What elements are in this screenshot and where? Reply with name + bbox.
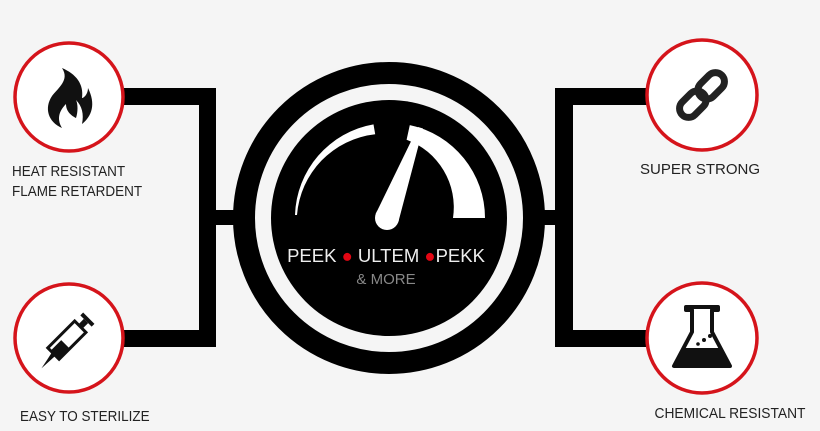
icon: flask bbox=[674, 307, 730, 366]
label: super strong: SUPER STRONG bbox=[640, 161, 760, 178]
icon: chain bbox=[676, 69, 728, 121]
gauge needle bbox=[375, 127, 423, 230]
label: flame retardent: FLAME RETARDENT bbox=[12, 183, 142, 200]
label: heat resistant: HEAT RESISTANT bbox=[12, 163, 125, 180]
connector: left bracket bbox=[110, 88, 239, 347]
central gauge bbox=[244, 73, 534, 363]
connector: right bracket bbox=[535, 88, 655, 347]
icon circle: strong bbox=[647, 40, 757, 150]
material text: PEEK ● ULTEM ●PEKK bbox=[287, 245, 486, 266]
icon circle: heat bbox=[15, 43, 123, 151]
gauge arc bbox=[295, 124, 485, 218]
sub text: & MORE bbox=[356, 271, 416, 288]
label: easy to sterilize: EASY TO STERILIZE bbox=[20, 408, 150, 425]
icon circle: sterilize bbox=[15, 284, 123, 392]
icon circle: chemical bbox=[647, 283, 757, 393]
label: chemical resistant: CHEMICAL RESISTANT bbox=[654, 406, 806, 422]
icon: flame bbox=[48, 68, 92, 128]
icon: syringe bbox=[34, 313, 94, 373]
